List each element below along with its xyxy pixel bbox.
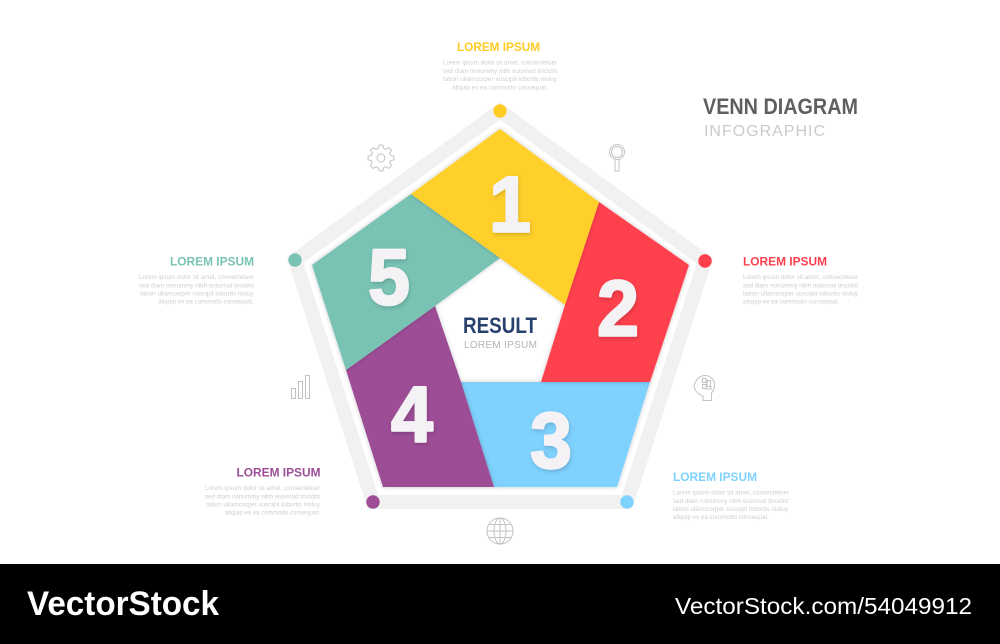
text block: blue: tation ullamcorper suscipit lobortis nisluy (673, 506, 789, 513)
segment 2: red (541, 202, 689, 382)
text block: yellow (443, 40, 558, 92)
outer pentagon frame (295, 111, 705, 502)
text block: red: sed diam nonummy nibh euismod tincidnt (743, 282, 858, 290)
text block: yellow: tation ullamcorper suscipit lobortis nisluy (443, 76, 558, 83)
text block: blue: LOREM IPSUM (673, 470, 757, 484)
text block: teal: Lorem ipsum dolor sit amet, consectetuer (139, 274, 255, 281)
text block: purple (205, 466, 321, 516)
segment 1: yellow (411, 129, 599, 305)
text block: blue: Lorem ipsum dolor sit amet, consectetuer (673, 490, 790, 496)
number 3: 3 (530, 397, 572, 485)
title: INFOGRAPHIC (704, 123, 825, 140)
text block: red: LOREM IPSUM (743, 254, 827, 268)
dot: teal (288, 253, 302, 267)
text block: blue: sed diam nonummy nibh euismod tincidnt (673, 498, 788, 505)
text block: teal: aliquip ex ea commodo consequat. (158, 298, 254, 306)
footer bar (0, 564, 1000, 644)
footer bar: VectorStock.com/54049912 (675, 593, 972, 619)
text block: blue: aliquip ex ea commodo consequat. (673, 514, 769, 521)
dot: purple (366, 495, 380, 509)
title (703, 94, 858, 140)
text block: red: aliquip ex ea commodo consequat. (743, 298, 839, 306)
segment 4: purple (346, 306, 494, 487)
text block: yellow: aliquip ex ea commodo consequat. (452, 84, 548, 92)
text block: teal: LOREM IPSUM (170, 254, 254, 268)
center result label: RESULT (463, 313, 537, 338)
icon: bar chart (292, 376, 310, 398)
title: VENN DIAGRAM (703, 94, 858, 119)
footer bar: VectorStock (27, 585, 219, 623)
number 1: 1 (489, 161, 531, 249)
icon: globe (487, 518, 513, 544)
text block: purple: LOREM IPSUM (236, 466, 320, 480)
text block: teal (139, 254, 255, 306)
dot: blue (620, 495, 634, 509)
number 2: 2 (597, 265, 639, 353)
text block: purple: Lorem ipsum dolor sit amet, consectetuer (205, 485, 321, 492)
text block: yellow: sed diam nonummy nibh euismod tincidnt (443, 68, 557, 75)
text block: red: tation ullamcorper suscipit lobortis nisluy (743, 290, 859, 298)
number 5: 5 (368, 233, 410, 321)
text block: red: Lorem ipsum dolor sit amet, consectetuer (743, 274, 859, 281)
segment 3: blue (461, 382, 650, 487)
center result label: LOREM IPSUM (464, 340, 537, 351)
text block: red (743, 254, 859, 306)
text block: teal: tation ullamcorper suscipit lobortis nisluy (140, 290, 255, 298)
number 4: 4 (391, 371, 433, 459)
dot: yellow (493, 104, 507, 118)
text block: teal: sed diam nonummy nibh euismod tincidnt (139, 282, 254, 290)
dot: red (698, 254, 712, 268)
text block: yellow: LOREM IPSUM (457, 40, 540, 54)
pentagon segments (312, 129, 689, 487)
text block: yellow: Lorem ipsum dolor sit amet, consectetuer (443, 60, 558, 66)
icon: gear (368, 145, 394, 171)
center result label (463, 313, 537, 351)
text block: purple: sed diam nonummy nibh euismod tincidnt (205, 494, 320, 500)
text block: blue (673, 470, 790, 521)
icon: head (694, 376, 714, 400)
text block: purple: aliquip ex ea commodo consequat. (225, 510, 320, 516)
segment 5: teal (312, 194, 500, 370)
text block: purple: tation ullamcorper suscipit lobortis nisluy (206, 502, 321, 508)
icon: magnifier (610, 144, 624, 171)
